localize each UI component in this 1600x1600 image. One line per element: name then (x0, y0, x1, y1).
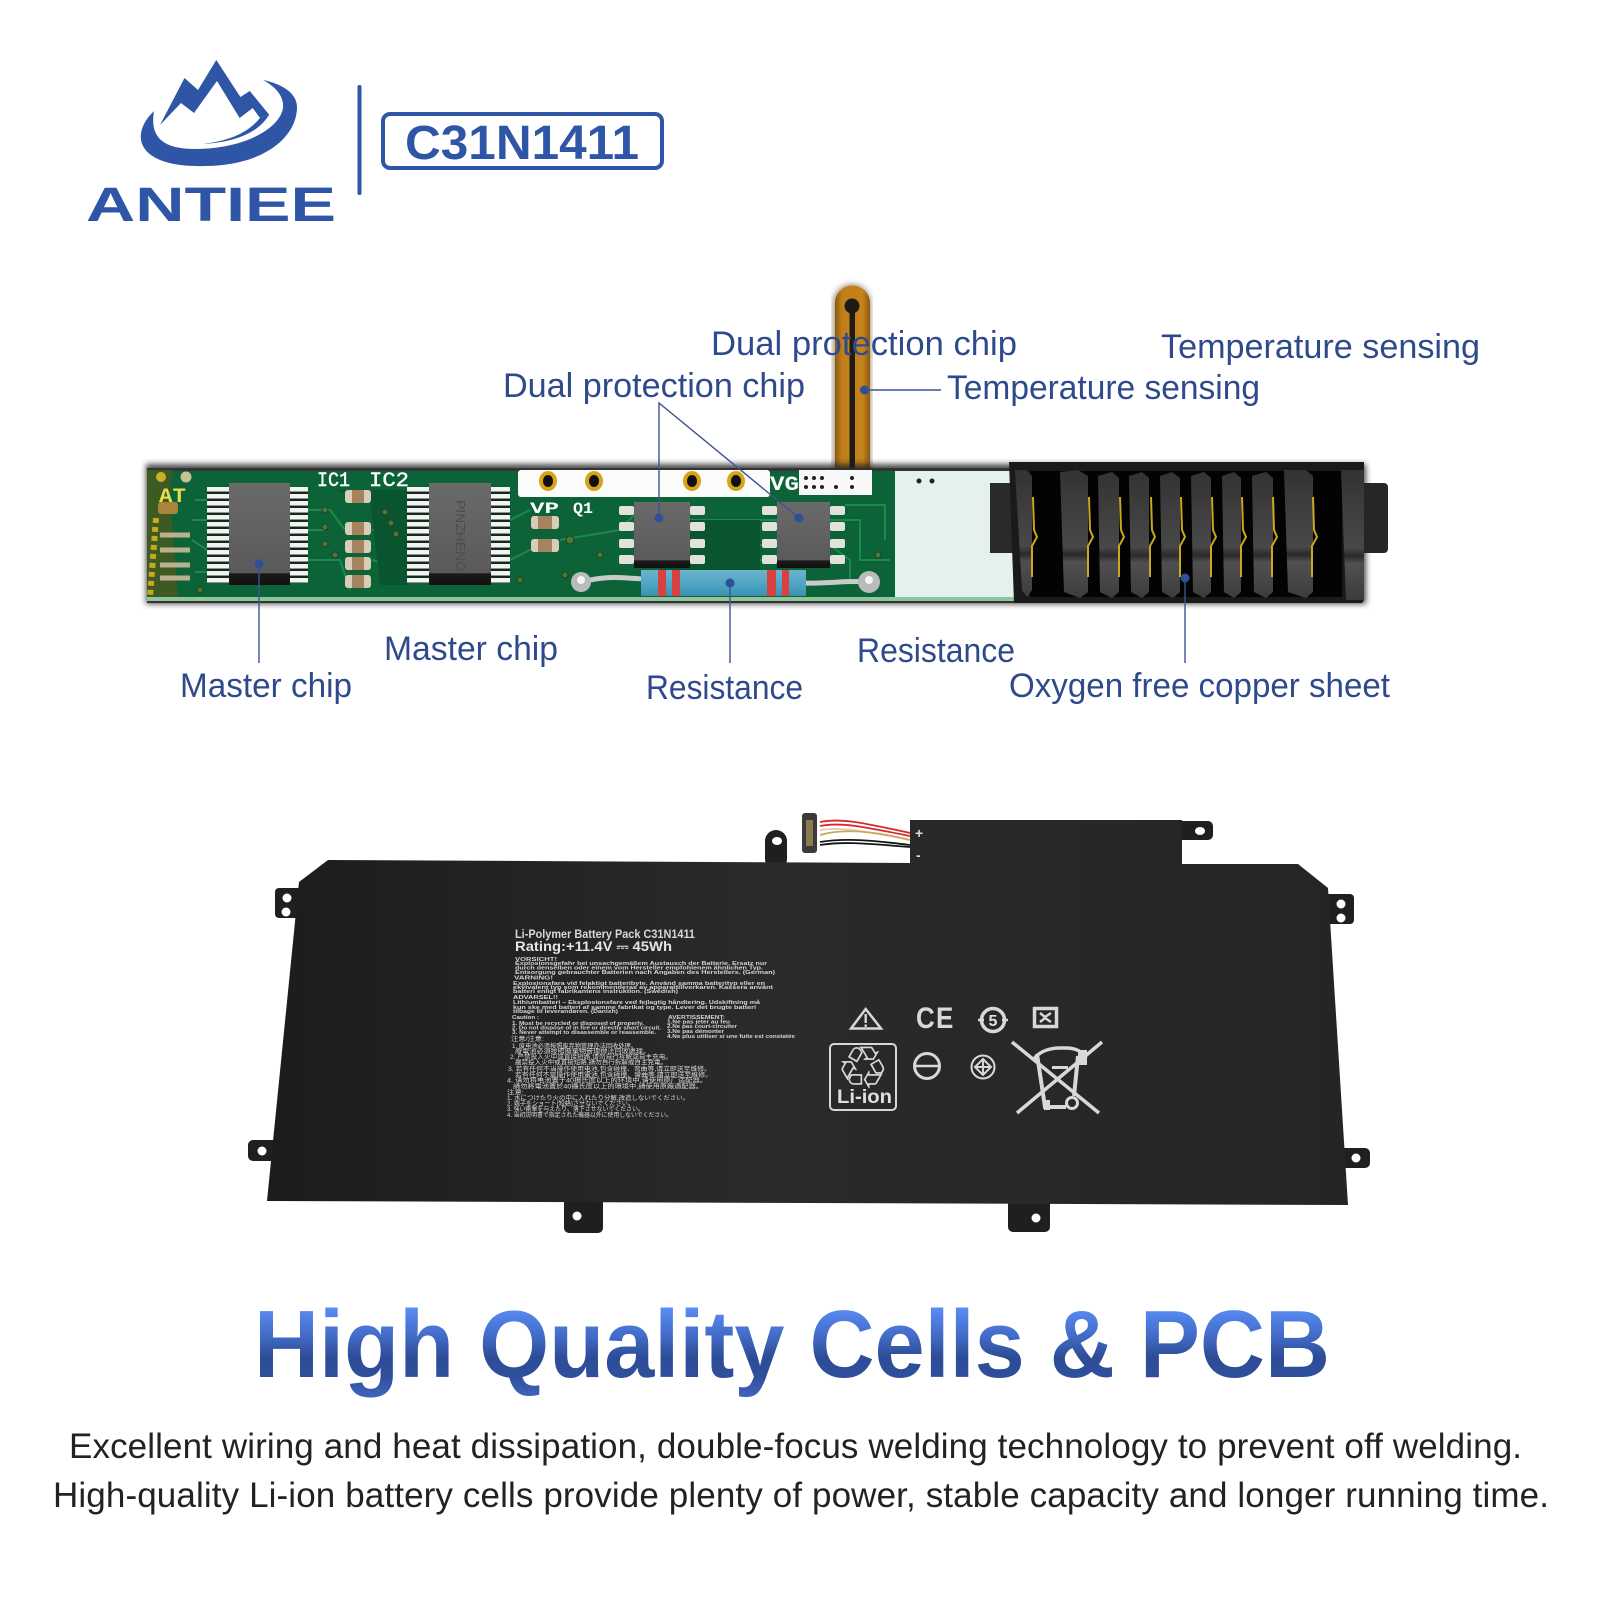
copper sheet connector (990, 462, 1388, 603)
battery specification label: 注意: (507, 1088, 524, 1096)
battery specification label: Li-Polymer Battery Pack C31N1411 (515, 929, 696, 941)
gold vias (541, 473, 743, 489)
battery specification label: AVERTISSEMENT: (668, 1015, 725, 1021)
master chip pins and packages: PINZHENG (453, 500, 468, 572)
battery specification label: 1.Ne pas jeter au feu (667, 1020, 731, 1026)
icon: Li-ion recycling box: ♲ (837, 1034, 889, 1102)
callout: master chip (upper): Master chip (384, 630, 558, 668)
icon: warning triangle (851, 1009, 881, 1028)
icon: CE mark: E (936, 1001, 953, 1034)
battery specification label: tilbage til leverandøren. (Danish) (513, 1009, 618, 1015)
icon: orbit swoosh (141, 80, 297, 166)
icon: battery recycling square (1034, 1008, 1056, 1026)
callout: dual protection chip with leaders (503, 367, 805, 522)
via dots (197, 507, 881, 593)
battery specification label: 4.Ne plus utiliser si une fuite est constatée (667, 1034, 795, 1040)
battery specification label: durch denselben oder einem vom Hersteller empfohlenem ähnlichen Typ. (515, 966, 764, 972)
battery specification label: 3. 強い衝撃を与えたり、落下させないでください。 (507, 1105, 644, 1113)
copper traces (192, 500, 890, 590)
battery specification label: 嚴禁投入火中或直接短路,請勿自行拆解或自主充電。 (515, 1058, 667, 1066)
description line 1: Excellent wiring and heat dissipation, double-focus welding technology to prevent off welding. (69, 1427, 1522, 1466)
silkscreen white strips (518, 470, 770, 497)
callout: resistance with leader (646, 578, 803, 707)
battery specification label: ekvivalent typ som rekommenderas av apparattillverkaren. Kassera använt (513, 985, 773, 991)
battery specification label: Caution : (512, 1015, 539, 1021)
battery specification label: 3. Never attempt to disassemble or reassemble. (512, 1030, 656, 1036)
divider between logo and model number (358, 85, 362, 195)
PCB protection board (146, 464, 1366, 604)
battery specification label: 1. Must be recycled or disposed of properly. (512, 1021, 644, 1027)
battery specification label: 2.Ne pas court-circuiter (667, 1024, 738, 1030)
silkscreen labels: VP (530, 500, 559, 518)
gold contacts (1032, 497, 1317, 577)
battery specification label: 請勿將電池置於40攝氏度以上的環境中,請使用原廠適配器。 (513, 1082, 703, 1090)
battery specification label: 1. 水につけたり火の中に入れたり分解,改造しないでください。 (507, 1094, 689, 1102)
icon: 5-year recycling period (978, 1008, 1008, 1032)
polarity marks: + (915, 825, 923, 841)
battery specification label: Lithiumbatteri – Eksplosionsfare ved fejlagtig håndtering. Udskiftning må (513, 999, 761, 1006)
battery specification label: 若有任何不當操作使用電池,包含碰撞、彎曲等,請立即送至維修。 (515, 1071, 712, 1079)
callout: resistance (upper): Resistance (857, 632, 1015, 670)
battery specification label: 3.Ne pas démonter (667, 1029, 725, 1035)
icon: CE mark: C (916, 1001, 935, 1034)
callout: master chip with leader: Master chip (180, 667, 352, 705)
test pad dots (804, 476, 934, 489)
battery specification label: Rating:+11.4V ⎓ 45Wh (515, 939, 672, 954)
battery specification label: VORSICHT! (515, 957, 557, 963)
icon: mountain peaks (160, 60, 269, 125)
silkscreen labels: IC2 (369, 470, 409, 493)
flex cable temperature sensor (833, 284, 871, 468)
cell body (267, 820, 1348, 1205)
callout: dual protection chip (upper): Dual protection chip (711, 325, 1017, 363)
battery specification label: Explosionsgefahr bei unsachgemäßem Austausch der Batterie. Ersatz nur (515, 961, 768, 967)
battery specification label: kun ske med batteri af samme fabrikat og type. Lever det brugte batteri (513, 1005, 757, 1011)
battery specification label: 2. Do not dispose of in fire or directly short circuit. (512, 1026, 661, 1032)
battery specification label: ADVARSEL!! (513, 995, 558, 1001)
mounting tabs (248, 821, 1370, 1233)
battery specification label: 廢電池必須按照廢棄物管理辦法回收處理。 (515, 1048, 650, 1056)
description text (53, 1427, 1549, 1515)
brand wordmark: ANTIEE (86, 179, 336, 232)
callout: temperature sensing (upper right): Temperature sensing (1161, 328, 1480, 366)
battery specification label: 4. 当初説明書で指定された機器以外に使用しないでください。 (507, 1111, 672, 1119)
battery specification label: Explosionsfara vid felaktigt batteribyte. Använd samma batterityp eller en (513, 981, 766, 987)
model number badge: C31N1411 (405, 117, 639, 170)
battery pack (248, 813, 1370, 1233)
connector teeth (1015, 470, 1364, 600)
battery specification label: 注意/注意: (511, 1035, 544, 1043)
callout: master chip with leader (180, 560, 352, 705)
silkscreen labels: IC1 (317, 470, 350, 493)
mounting holes (258, 827, 1360, 1222)
battery specification label: 4. 请勿将电池置于40摄氏度以上的环境中,请使用原厂适配器。 (507, 1076, 707, 1084)
battery specification label (507, 929, 795, 1119)
silkscreen labels: VG (770, 474, 799, 497)
silkscreen labels: AT (159, 486, 186, 509)
callout: temperature sensing with leader: Temperature sensing (947, 369, 1260, 407)
callout: oxygen free copper sheet with leader: Oxygen free copper sheet (1009, 667, 1391, 705)
callout: dual protection chip with leaders: Dual protection chip (503, 367, 805, 405)
icon: 5-year recycling period: 5 (989, 1013, 998, 1030)
title: High Quality Cells & PCB (254, 1291, 1330, 1398)
resistor with wire leads (571, 570, 880, 596)
gold edge pads (147, 470, 192, 597)
small capacitors (345, 490, 559, 588)
icon: circle with diamond (972, 1056, 994, 1078)
silkscreen labels (159, 470, 799, 518)
battery specification label: VARNING! (514, 976, 553, 982)
battery specification label: 2. 严禁投入火中或直接短路,请勿自行拆解或自主充电。 (510, 1053, 672, 1061)
battery specification label: batteri enligt fabrikantens instruktion. (Swedish) (513, 989, 678, 995)
battery specification label: 3. 若有任何不当操作使用电池,包含碰撞、弯曲等,请立即送至维修。 (508, 1065, 711, 1073)
callout: oxygen free copper sheet with leader (1009, 574, 1391, 705)
logo: ANTIEE mountain and wordmark (86, 60, 336, 232)
silkscreen labels: Q1 (573, 500, 593, 518)
icon: crossed-out wheelie bin (1012, 1042, 1102, 1113)
battery specification label: Entsorgung gebrauchter Batterien nach Angaben des Herstellers. (German) (515, 970, 775, 976)
battery specification label: 2. 端子をショート(短絡)させないでください。 (507, 1100, 634, 1108)
icon: circle with line (914, 1054, 940, 1078)
callout: resistance with leader: Resistance (646, 669, 803, 707)
battery specification label: 1. 废电池必须按照废弃物管理办法回收处理。 (512, 1042, 637, 1050)
description line 2: High-quality Li-ion battery cells provide plenty of power, stable capacity and longer running time. (53, 1476, 1549, 1515)
battery pack: - (916, 847, 921, 863)
icon: Li-ion recycling box: Li-ion (837, 1087, 892, 1108)
master chip pins and packages (207, 483, 510, 585)
wire harness and connector (802, 813, 910, 853)
dual protection chips (619, 502, 845, 568)
